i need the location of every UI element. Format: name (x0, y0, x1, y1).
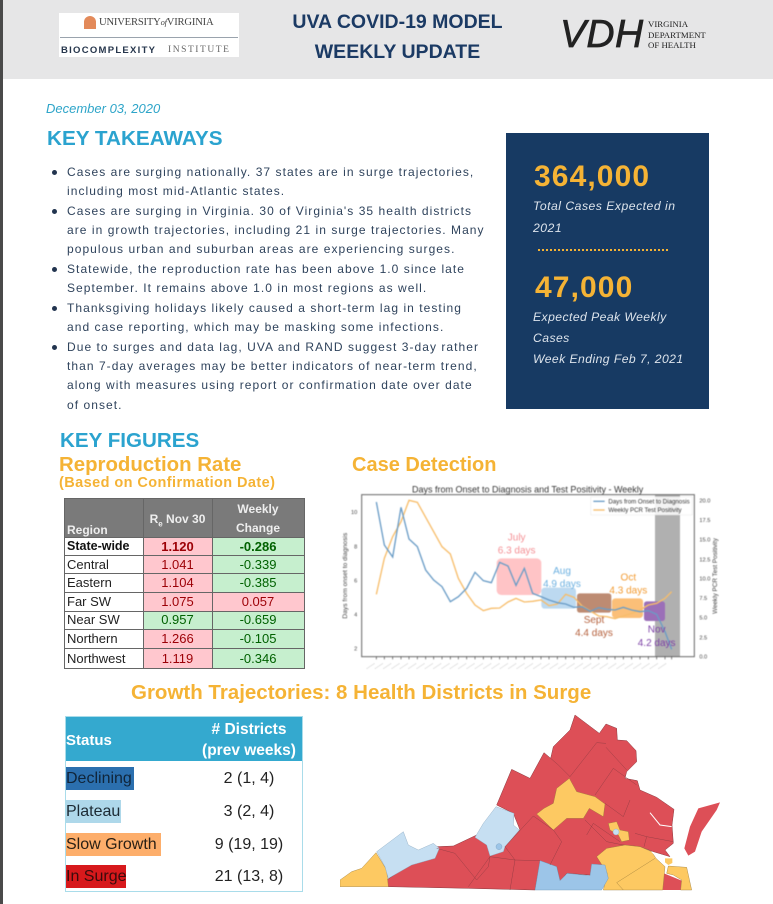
takeaways text block: September. It remains above 1.0 in most regions as well. (67, 281, 427, 295)
table: trajectory status (65, 716, 303, 892)
annotations: 6.3 days (498, 546, 536, 557)
logo: Virginia Department of Health: VIRGINIA (648, 19, 688, 29)
right axis: 5.0 (699, 616, 707, 622)
table: trajectory status: 9 (19, 19) (215, 836, 283, 853)
table: reproduction rate (64, 498, 305, 669)
table: reproduction rate: Near SW (67, 612, 120, 627)
takeaways text block: of onset. (67, 398, 122, 412)
left axis: 6 (354, 578, 357, 584)
districts in surge (387, 715, 674, 890)
right axis: 15.0 (699, 538, 710, 544)
table: reproduction rate: -0.105 (240, 631, 276, 646)
table: trajectory status: 21 (13, 8) (215, 868, 283, 885)
table: reproduction rate: -0.286 (240, 539, 276, 554)
takeaways text block (52, 165, 485, 412)
table lines (64, 498, 305, 669)
slow growth: central (537, 778, 605, 830)
heading: key figures: KEY FIGURES (60, 429, 199, 452)
takeaways text block: along with measures using report or confirmation date over date (67, 378, 473, 392)
slow growth: southeast (597, 845, 665, 890)
annotations: Sept (584, 615, 605, 626)
slow growth: coast (667, 866, 692, 890)
stat label: peak weekly: Week Ending Feb 7, 2021 (533, 352, 684, 366)
heading: case detection: Case Detection (352, 454, 496, 476)
table: reproduction rate: Change (236, 521, 280, 535)
logo: Virginia Department of Health: VDH (560, 13, 644, 56)
annotations: 4.3 days (609, 586, 647, 597)
table: reproduction rate: 1.104 (161, 575, 194, 590)
dotted divider (538, 249, 668, 251)
logo: University of Virginia Biocomplexity Institute: UNIVERSITYofVIRGINIA (99, 17, 213, 28)
left axis: 4 (354, 612, 357, 618)
table: reproduction rate: 1.075 (161, 594, 194, 609)
stat label: peak weekly: Expected Peak Weekly (533, 310, 667, 324)
table: reproduction rate: 1.041 (161, 557, 194, 572)
stat label: total cases: Total Cases Expected in (533, 199, 675, 213)
plateau: southwest (377, 832, 439, 878)
right axis: 17.5 (699, 518, 710, 524)
right axis: 20.0 (699, 499, 710, 505)
subheading: confirmation date: (Based on Confirmation Date) (59, 475, 275, 491)
right axis: 0.0 (699, 655, 707, 661)
declining: southside (535, 861, 608, 890)
title: WEEKLY UPDATE (315, 41, 480, 63)
logo: University of Virginia Biocomplexity Institute (59, 13, 239, 57)
takeaways text block: including most mid-Atlantic states. (67, 184, 285, 198)
annotations: Oct (621, 572, 636, 583)
table: reproduction rate: Central (67, 557, 109, 572)
table: reproduction rate: Eastern (67, 575, 112, 590)
table: reproduction rate: 0.957 (161, 612, 194, 627)
takeaways text block: Due to surges and data lag, UVA and RAND suggest 3-day rather (67, 340, 479, 354)
table: reproduction rate: -0.346 (240, 651, 276, 666)
annotations: 4.9 days (543, 579, 581, 590)
right axis: 10.0 (699, 577, 710, 583)
x-axis ticks (376, 657, 672, 659)
table: reproduction rate: Northwest (67, 651, 126, 666)
stat label: peak weekly: Cases (533, 331, 570, 345)
takeaways text block: are in growth trajectories, including 21 in surge trajectories. Many (67, 223, 485, 237)
table: reproduction rate: Weekly (237, 502, 279, 516)
annotations: July (508, 532, 526, 543)
heading: growth trajectories: Growth Trajectories: 8 Health Districts in Surge (131, 681, 591, 704)
table: trajectory status: Status (66, 732, 112, 749)
table: reproduction rate: Region (67, 523, 108, 537)
left axis (342, 510, 357, 653)
takeaways text block: and case reporting, which may be masking some infections. (67, 320, 444, 334)
left axis: 8 (354, 544, 357, 550)
left axis: Days from onset to diagnosis (342, 532, 349, 619)
series: days from onset to diagnosis (376, 502, 672, 649)
annotations (498, 532, 676, 649)
takeaways text block: than 7-day averages may be better indicators of near-term trend, (67, 359, 478, 373)
logo: University of Virginia Biocomplexity Institute: BIOCOMPLEXITY (61, 45, 156, 56)
left axis: 10 (351, 510, 357, 516)
right axis: Weekly PCR Test Positivity (712, 537, 719, 614)
title (292, 11, 503, 63)
annotations: 4.4 days (575, 628, 613, 639)
table: reproduction rate: Northern (67, 631, 118, 646)
takeaways text block: Statewide, the reproduction rate has been above 1.0 since late (67, 262, 465, 276)
header band (3, 0, 773, 79)
legend (591, 497, 692, 515)
table: trajectory status: # Districts (212, 721, 286, 738)
table: reproduction rate: 1.266 (161, 631, 194, 646)
map: Virginia health districts (340, 714, 720, 890)
logo: Virginia Department of Health (560, 13, 706, 56)
line chart: onset to diagnosis and test positivity: Days from Onset to Diagnosis and Test Positivity - Weekly (412, 484, 644, 494)
line chart: onset to diagnosis and test positivity (342, 484, 720, 669)
table: trajectory status: (prev weeks) (202, 742, 296, 759)
panel: projections (506, 133, 709, 409)
takeaways text block: Thanksgiving holidays likely caused a short-term lag in testing (67, 301, 462, 315)
table: reproduction rate: State-wide (67, 539, 130, 553)
takeaways text block: Cases are surging nationally. 37 states are in surge trajectories, (67, 165, 474, 179)
slow growth: richmond area (608, 822, 629, 842)
table: trajectory status: Declining (66, 770, 132, 787)
eastern shore (684, 802, 720, 856)
logo: Virginia Department of Health: DEPARTMENT (648, 30, 706, 40)
stat label: total cases: 2021 (533, 221, 562, 235)
stat label: peak weekly (533, 310, 684, 366)
logo: University of Virginia Biocomplexity Institute: INSTITUTE (168, 45, 230, 55)
table: trajectory status: 3 (2, 4) (224, 803, 274, 820)
logo: Virginia Department of Health: OF HEALTH (648, 40, 696, 50)
stat: peak weekly: 47,000 (535, 271, 633, 304)
district borders (437, 743, 673, 890)
right axis (699, 499, 719, 661)
annotations: Nov (648, 625, 666, 636)
chesapeake inlets (650, 813, 672, 865)
small city districts (496, 844, 502, 850)
plateau: near southwest (475, 807, 519, 856)
table: reproduction rate: 0.057 (242, 594, 274, 609)
legend: Days from Onset to Diagnosis (608, 498, 690, 505)
monthly shaded boxes (497, 558, 665, 621)
table: reproduction rate: 1.119 (162, 651, 193, 666)
title: UVA COVID-19 MODEL (292, 11, 503, 33)
table: reproduction rate: Far SW (67, 594, 111, 609)
Hampton Roads surge (663, 873, 682, 890)
table: trajectory status: Plateau (66, 803, 120, 820)
table: reproduction rate: 1.120 (161, 539, 194, 554)
table: reproduction rate: Re Nov 30 (150, 512, 205, 528)
heading: key takeaways: KEY TAKEAWAYS (47, 127, 223, 150)
stat: total cases: 364,000 (534, 160, 650, 193)
table: trajectory status: In Surge (66, 868, 126, 885)
takeaways text block: populous urban and suburban areas are experiencing surges. (67, 242, 455, 256)
takeaways text block: Cases are surging in Virginia. 30 of Virginia's 35 health districts (67, 204, 472, 218)
southeast dividing line (617, 858, 655, 890)
right axis: 2.5 (699, 635, 707, 641)
legend: Weekly PCR Test Positivity (608, 507, 683, 514)
date: December 03, 2020 (46, 101, 160, 116)
table: reproduction rate: -0.659 (240, 612, 276, 627)
table: trajectory status: 2 (1, 4) (224, 770, 274, 787)
annotations: Aug (553, 566, 571, 577)
table: trajectory status: Slow Growth (66, 836, 157, 853)
left axis: 2 (354, 647, 357, 653)
heading: reproduction rate: Reproduction Rate (59, 454, 241, 476)
slow growth: far southwest (340, 853, 388, 887)
series: weekly PCR positivity (376, 500, 672, 619)
table: reproduction rate: -0.339 (240, 557, 276, 572)
right axis: 12.5 (699, 557, 710, 563)
annotations: 4.2 days (638, 638, 676, 649)
right axis: 7.5 (699, 596, 707, 602)
table: reproduction rate: -0.385 (240, 575, 276, 590)
stat label: total cases (532, 199, 675, 235)
left window edge (0, 0, 3, 904)
